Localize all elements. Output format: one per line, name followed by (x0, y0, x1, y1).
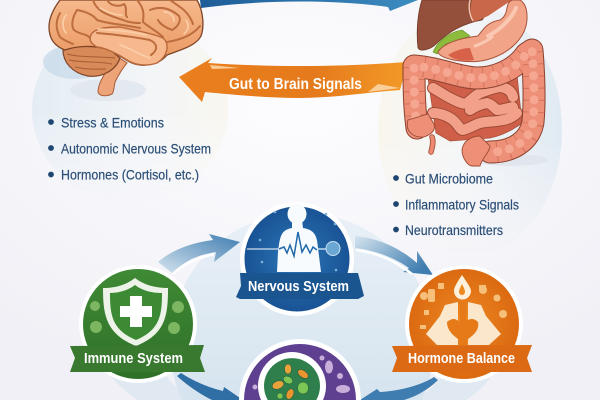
arrow: hormone to microbiome (360, 377, 438, 400)
icon: shield (103, 278, 168, 346)
icon: petri dish (258, 352, 326, 400)
label banner (392, 345, 532, 372)
small intestine (428, 75, 522, 141)
liver (417, 0, 488, 50)
large intestine (414, 50, 534, 152)
icon: hormone drop (454, 275, 471, 300)
label: Immune System (84, 351, 183, 367)
label: Nervous System (248, 279, 349, 295)
brain folds (57, 0, 200, 55)
arrow: nervous to hormone (355, 236, 433, 275)
icon: confetti (420, 283, 507, 329)
bullet item: Stress & Emotions (61, 114, 164, 130)
panel: gut backdrop (378, 10, 562, 202)
cerebellum (63, 45, 120, 76)
decorative arc bands (112, 376, 490, 400)
icon: torso (426, 302, 501, 345)
central disc (170, 213, 434, 400)
rectum (462, 136, 490, 166)
arrow label: Gut to Brain Signals (229, 76, 362, 93)
bullet item: Autonomic Nervous System (61, 140, 211, 156)
list: gut factors (393, 170, 519, 238)
list: brain factors (48, 114, 211, 182)
arrow: gut to brain signals (179, 58, 407, 102)
icon: brain (43, 0, 203, 101)
icon: bacteria (271, 364, 310, 400)
arrow: immune to nervous (158, 234, 240, 273)
label: Hormone Balance (408, 351, 515, 367)
node: hormone balance (392, 265, 532, 383)
temporal lobe (90, 27, 167, 65)
label banner (236, 273, 364, 299)
label banner (70, 345, 205, 372)
brain stem (98, 57, 127, 96)
node: gut microbiome (239, 339, 361, 400)
icon: purple microbes (252, 356, 350, 393)
icon: human figure (247, 204, 340, 272)
arrow: immune to microbiome (177, 373, 243, 400)
bullet item: Neurotransmitters (405, 222, 503, 238)
node: nervous system (236, 202, 364, 316)
icon: nerve specks (259, 211, 337, 271)
cecum (407, 114, 435, 137)
bullet item: Inflammatory Signals (405, 196, 519, 212)
icon: digestive organs (407, 0, 548, 166)
arrow: brain to gut (200, 0, 418, 11)
cerebrum (49, 0, 203, 65)
bullet item: Hormones (Cortisol, etc.) (61, 166, 199, 182)
bullet item: Gut Microbiome (405, 170, 493, 186)
node: immune system (70, 265, 205, 383)
white stripe: hormone arrow (356, 250, 412, 274)
gallbladder (433, 30, 470, 54)
stomach (438, 0, 527, 62)
white stripe: nervous arrow (173, 254, 214, 274)
icon: green spots (90, 301, 184, 334)
panel: brain backdrop (32, 42, 228, 156)
